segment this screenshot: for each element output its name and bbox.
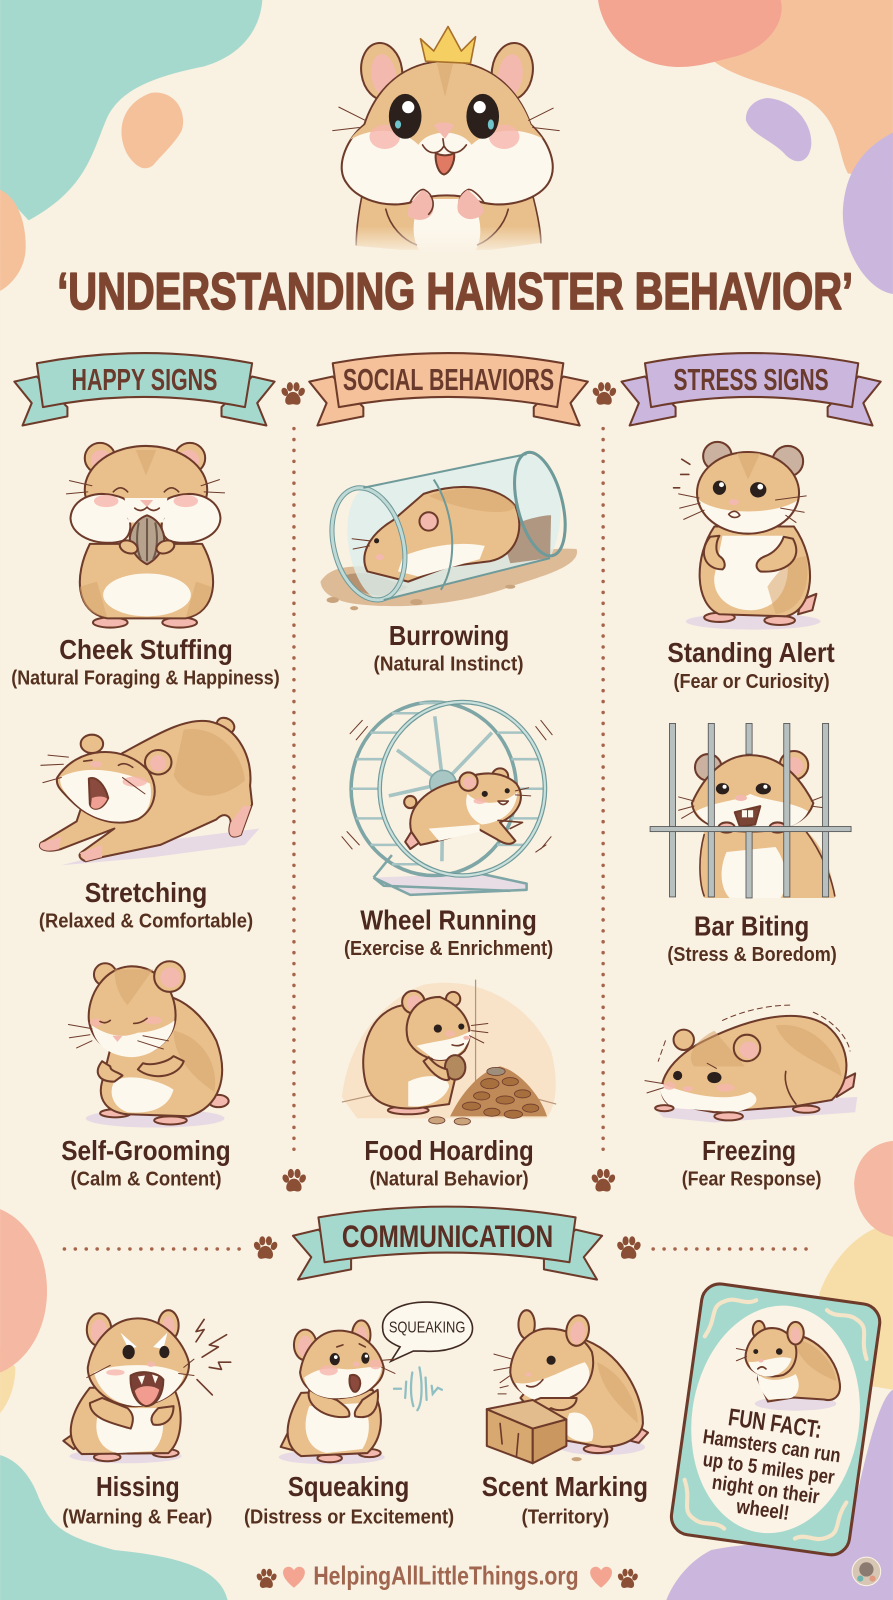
paw divider right (591, 382, 617, 405)
sublabel: (Warning & Fear) (62, 1506, 212, 1528)
panel: squeaking (244, 1302, 473, 1528)
banner: social behaviors: SOCIAL BEHAVIORS (343, 363, 554, 397)
paw right of communication (616, 1236, 642, 1259)
banner: communication (293, 1207, 602, 1280)
sublabel: (Calm & Content) (70, 1169, 221, 1191)
panel: stretching (39, 715, 259, 933)
sublabel: (Stress & Boredom) (667, 944, 837, 966)
icon: sound waves (394, 1367, 442, 1410)
label: Cheek Stuffing (59, 634, 233, 665)
icon: hamster with seed (66, 443, 225, 628)
icon: hamster with food pile (342, 980, 556, 1125)
label: Wheel Running (360, 905, 537, 936)
sublabel: (Fear Response) (682, 1169, 821, 1191)
banner: happy signs: HAPPY SIGNS (72, 363, 217, 397)
heart (590, 1567, 612, 1588)
icon: hamster biting cage bars (650, 723, 851, 898)
panel: food hoarding (342, 980, 556, 1191)
panel: burrowing (320, 447, 577, 675)
icon: hamster in wheel (342, 702, 552, 895)
icon: alert hamster (674, 442, 820, 630)
small logo (852, 1557, 881, 1586)
panel: standing alert (667, 442, 835, 693)
paw bottom of right divider (590, 1169, 616, 1191)
sublabel: (Distress or Excitement) (244, 1506, 454, 1528)
icon: frozen hamster (645, 1005, 857, 1122)
footer (256, 1563, 639, 1591)
label: Freezing (702, 1135, 796, 1166)
panel: fun fact card (669, 1282, 882, 1557)
icon: grooming hamster (68, 961, 229, 1128)
banner: communication: COMMUNICATION (342, 1218, 553, 1254)
panel: self-grooming (61, 961, 231, 1191)
icon: squeaking hamster (279, 1320, 396, 1464)
label: Squeaking (288, 1471, 409, 1502)
sublabel: (Natural Behavior) (369, 1169, 529, 1191)
main hamster mascot with crown (333, 27, 559, 255)
label: Self-Grooming (61, 1135, 231, 1166)
paw bottom of left divider (281, 1169, 307, 1191)
heart (283, 1567, 305, 1588)
fun fact heading: FUN FACT: (727, 1404, 823, 1444)
speech bubble: SQUEAKING (389, 1320, 465, 1337)
dotted column dividers (64, 429, 810, 1249)
icon: hissing hamster (63, 1310, 231, 1463)
paw divider left (280, 382, 306, 405)
icon: hamster on wooden block (487, 1310, 648, 1463)
sublabel: (Territory) (522, 1506, 609, 1528)
fun fact text: Hamsters can run (701, 1426, 842, 1467)
paw left of communication (253, 1236, 279, 1259)
speech bubble (383, 1302, 473, 1361)
banner: stress signs: STRESS SIGNS (674, 363, 829, 397)
panel: freezing (645, 1005, 857, 1191)
sublabel: (Natural Instinct) (374, 653, 524, 675)
icon: hamster in tube (320, 447, 577, 610)
panel: cheek stuffing (11, 443, 280, 690)
label: Food Hoarding (364, 1135, 534, 1166)
label: Scent Marking (482, 1471, 648, 1502)
sublabel: (Natural Foraging & Happiness) (11, 668, 280, 690)
label: Burrowing (389, 620, 509, 651)
fun fact text: wheel! (734, 1496, 791, 1525)
sublabel: (Relaxed & Comfortable) (39, 911, 253, 933)
icon: hamster (736, 1321, 840, 1411)
panel: bar biting (650, 723, 851, 966)
sublabel: (Exercise & Enrichment) (344, 938, 553, 960)
panel: wheel running (342, 702, 553, 960)
panel: hissing (62, 1310, 231, 1528)
paw (256, 1569, 278, 1588)
icon: stretching hamster (40, 715, 259, 865)
fun fact text: night on their (711, 1472, 821, 1509)
panel: scent marking (482, 1310, 648, 1528)
banner: stress signs (622, 353, 881, 426)
label: Bar Biting (694, 911, 809, 942)
fun fact text: up to 5 miles per (701, 1449, 836, 1489)
decorative corner swirls (679, 1294, 872, 1545)
paw (617, 1569, 639, 1588)
banner: social behaviors (309, 353, 588, 426)
sublabel: (Fear or Curiosity) (674, 671, 830, 693)
website: HelpingAllLittleThings.org (313, 1563, 579, 1591)
label: Standing Alert (667, 637, 835, 668)
label: Hissing (96, 1471, 180, 1502)
label: Stretching (85, 877, 207, 908)
banner: happy signs (14, 353, 275, 426)
